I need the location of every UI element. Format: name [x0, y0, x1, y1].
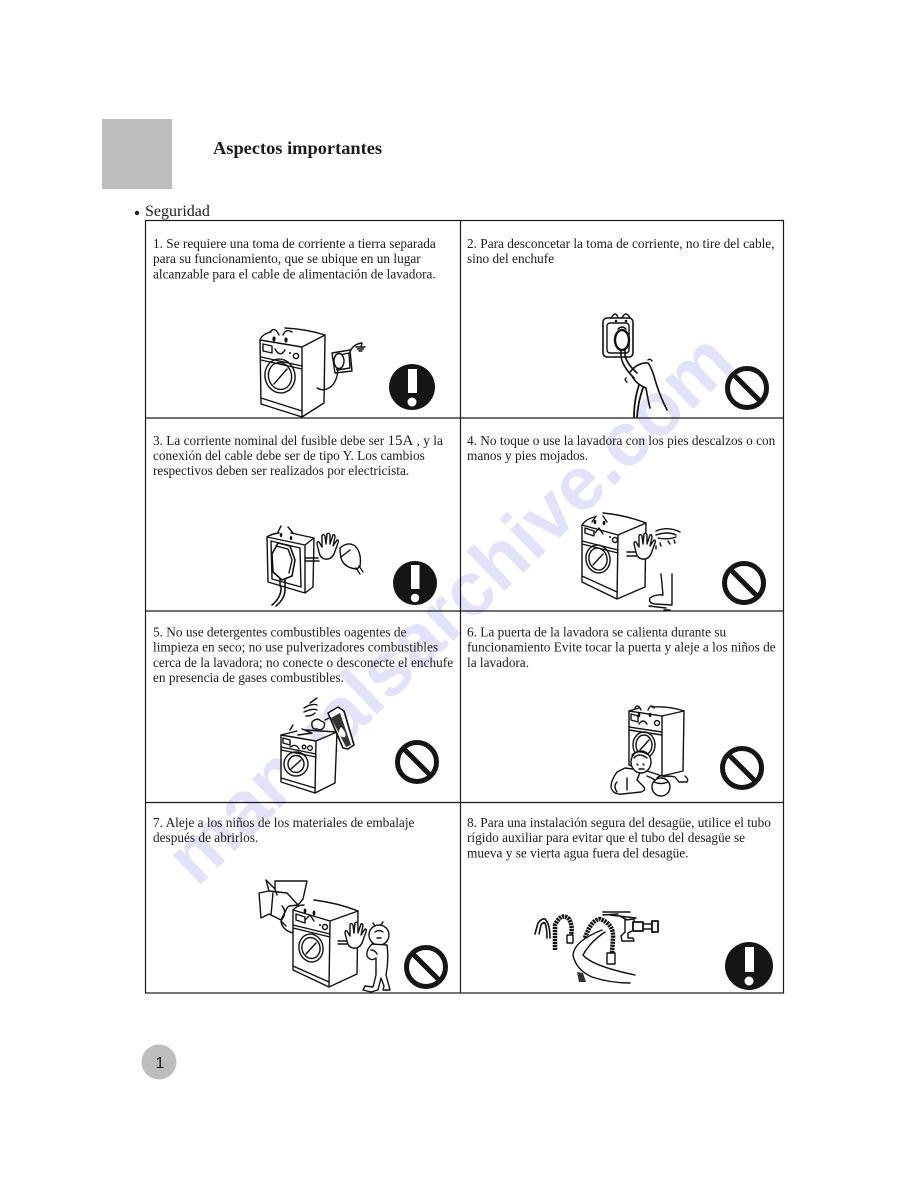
icon: washing machine with wall socket	[260, 328, 365, 417]
icon: hand pulling plug from socket	[603, 314, 667, 417]
section heading: Seguridad: Seguridad	[145, 203, 210, 220]
panel 8: drain hose	[467, 815, 773, 990]
text: item 5: 5. No use detergentes combustibles oagentes de	[153, 624, 407, 640]
text: item 2: 2. Para desconcetar la toma de corriente, no tire del cable,	[467, 236, 775, 251]
icon: prohibited sign	[406, 948, 446, 986]
icon: mandatory exclamation	[389, 364, 435, 410]
panel 4: wet hands and bare feet	[467, 433, 776, 610]
text: item 1: alcanzable para el cable de alimentación de lavadora.	[153, 266, 436, 282]
text: item 3: conexión del cable debe ser de tipo Y. Los cambios	[153, 448, 425, 463]
icon: prohibited sign	[398, 742, 436, 782]
watermark: manualsarchive.com	[150, 317, 750, 900]
text: item 7: 7. Aleje a los niños de los materiales de embalaje	[153, 815, 415, 830]
text: item 6: la lavadora.	[467, 655, 529, 670]
text: item 8: 8. Para una instalación segura del desagüe, utilice el tubo	[467, 815, 771, 830]
panel 6: hot door	[467, 624, 776, 796]
icon: drain hoses, tub and tap	[535, 912, 658, 983]
icon: washing machine, packaging and child	[259, 880, 390, 992]
panel 5: combustibles	[153, 624, 453, 793]
text: item 7: después de abrirlos.	[153, 830, 258, 845]
safety table grid	[146, 220, 784, 993]
text: item 6: 6. La puerta de la lavadora se calienta durante su	[467, 624, 727, 640]
text: item 5: cerca de la lavadora; no conecte o desconecte el enchufe	[153, 655, 453, 670]
text: item 1: 1. Se requiere una toma de corriente a tierra separada	[153, 236, 436, 251]
icon: mandatory exclamation	[725, 942, 773, 990]
text: item 4: manos y pies mojados.	[467, 448, 588, 463]
panel 2: unplugging	[467, 236, 775, 417]
icon: prohibited sign	[728, 368, 766, 408]
panel 3: fuse	[153, 433, 443, 606]
text: item 5: limpieza en seco; no use pulverizadores combustibles	[153, 640, 438, 654]
text: item 8: rígido auxiliar para evitar que el tubo del desagüe se	[467, 830, 745, 845]
text: item 3: 3. La corriente nominal del fusible debe ser 15A , y la	[153, 433, 443, 449]
icon: plug character with raised hand	[267, 526, 363, 606]
text: item 4: 4. No toque o use la lavadora con los pies descalzos o con	[467, 433, 776, 448]
text: item 8: mueva y se vierta agua fuera del desagüe.	[467, 846, 689, 860]
text: item 2: sino del enchufe	[467, 251, 554, 266]
page number badge: 1	[156, 1055, 165, 1072]
icon: prohibited sign	[722, 748, 762, 788]
icon: washing machine, wet hand and foot	[582, 513, 680, 610]
icon: prohibited sign	[724, 564, 764, 602]
icon: mandatory exclamation	[393, 561, 437, 605]
text: item 6: funcionamiento Evite tocar la puerta y aleje a los niños de	[467, 640, 776, 654]
text: item 3: respectivos deben ser realizados por electricista.	[153, 463, 409, 478]
chapter tab: grey square	[102, 119, 172, 189]
icon: washing machine with crawling child	[611, 706, 688, 796]
panel 7: packaging	[153, 815, 446, 992]
text: item 1: para su funcionamiento, que se ubique en un lugar	[153, 251, 421, 266]
panel 1: earthed socket	[153, 236, 436, 417]
icon: washing machine with spray can	[281, 698, 354, 793]
page number badge	[142, 1044, 176, 1080]
title: Aspectos importantes	[213, 138, 382, 158]
text: item 5: en presencia de gases combustibles.	[153, 670, 344, 685]
